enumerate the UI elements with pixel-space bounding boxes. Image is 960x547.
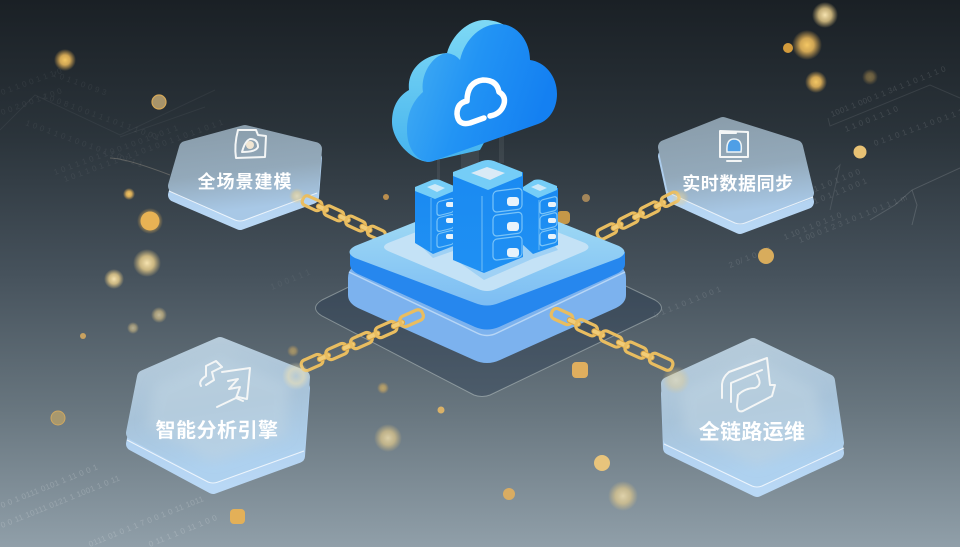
hex side (665, 133, 807, 227)
cloud to server beams (437, 135, 504, 182)
hex inner glow (681, 357, 824, 466)
hexagon: full scene modeling (169, 130, 317, 223)
background code pattern: 1 1 0 1 1 0 0 (812, 167, 862, 194)
server: right (521, 180, 558, 254)
platform inner plate (384, 206, 588, 291)
hex inner glow (146, 356, 290, 462)
background code pattern: 0 1 1 0 0 1 1 1 0 (0, 66, 64, 97)
label: 实时数据同步 (682, 173, 794, 194)
background code pattern: 0 0 11 10111 0121 1 1001 1 0 11 (0, 474, 121, 530)
icon: scene frame (235, 130, 266, 158)
label: 智能分析引擎 (156, 419, 278, 442)
hex lower edge highlight (664, 444, 844, 487)
cloud back (392, 20, 530, 162)
hex side (133, 355, 303, 487)
hex side (668, 355, 837, 490)
icon: layered map (722, 358, 775, 411)
chain: top-left (301, 194, 387, 242)
chain joint glows (282, 188, 690, 394)
platform base highlight (349, 272, 625, 336)
cloud front (407, 24, 557, 162)
icon: monitor (720, 131, 748, 161)
hex face (175, 132, 315, 214)
background code pattern: 0 0 2 0 0 1 1 0 0 (0, 86, 64, 117)
hex lower edge highlight (669, 193, 813, 224)
background code pattern: 2 0/ 1 0 0 3 (727, 245, 772, 270)
icon: analysis engine glyph (200, 361, 250, 407)
background code pattern: 1 0 1 1 0 1 1 1 0 1 1 0 1 0 0 1 1 0 1 1 0 1 1 (63, 117, 225, 184)
background code pattern: 1 1 0 1 1 1 0 0 1 (805, 176, 869, 209)
label: 全场景建模 (198, 171, 292, 192)
server: left (415, 180, 456, 254)
platform shadow outline (316, 228, 662, 396)
chain: top-right (596, 191, 680, 240)
label: 全链路运维 (699, 420, 805, 444)
platform top face (350, 196, 624, 306)
hexagon: intelligent analysis engine (127, 344, 304, 487)
background code pattern: 1 10 1 1 0 1 1 0 (782, 210, 843, 242)
background code pattern: 0 1 1 1 0 1 1 0 0 1 (652, 284, 723, 320)
server base shadows (415, 225, 558, 280)
background code pattern: 1 0 1 1 1 0 1 1 0 0 1 0 0 1 0 0 1 1 (53, 123, 180, 177)
chain: bottom-left (300, 308, 425, 372)
background code pattern: 0 0 1 0111 0101 1 11 0 0 1 (0, 462, 100, 510)
hexagon: full link operations (664, 345, 844, 490)
chain: bottom-right (550, 307, 674, 372)
background code pattern: 1 0 0 8 1 0 0 1 1 1 0 1 1 1 0 0 1 (41, 91, 161, 142)
hex lower edge highlight (127, 440, 304, 483)
background code pattern: 1001 1 000 1 1 34 1 1 0 1 1 1 0 (829, 64, 947, 119)
background code pattern: 1 0 0 1 1 1 (269, 268, 312, 292)
background code pattern: 1 1 0 0 1 1 1 0 (843, 104, 900, 134)
server: center (453, 160, 523, 273)
platform base layer (348, 262, 626, 363)
background code pattern: 1 0 0 1 1 0 1 0 0 1 0 1 1 0 1 1 1 (24, 118, 144, 169)
cloud (392, 20, 557, 162)
hex side (175, 141, 315, 223)
background code pattern: 1 0 1 1 0 0 9 3 (51, 69, 108, 97)
background code pattern: 1 00 0 1 2 3 1 0 1 1 0 1 1 1 m (797, 193, 909, 245)
hex face (668, 345, 837, 480)
hex face (133, 344, 303, 476)
icon: cloud glyph (457, 80, 504, 124)
hex face (665, 124, 807, 218)
platform blue band (350, 252, 625, 330)
hexagon: realtime sync (665, 124, 813, 227)
hex lower edge highlight (169, 191, 317, 221)
central platform (348, 196, 626, 363)
